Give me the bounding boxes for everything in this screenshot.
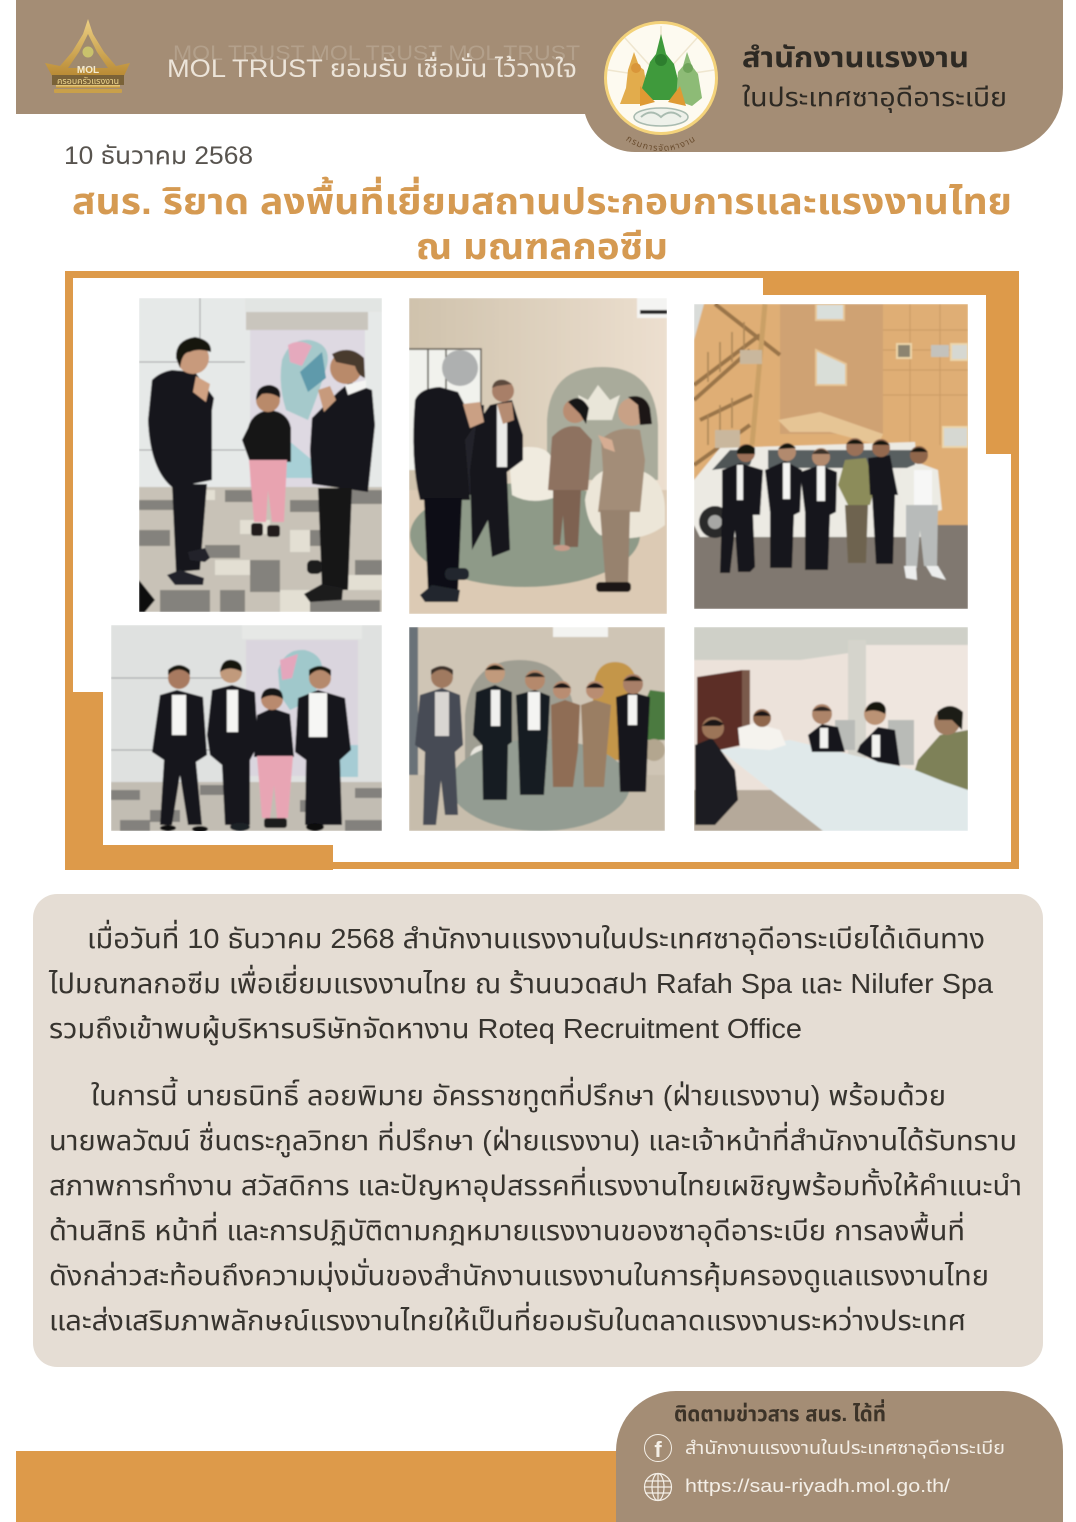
icon: MOL gold logo: ครอบครัวแรงงาน	[57, 76, 119, 86]
date: 10 ธันวาคม 2568	[64, 142, 253, 170]
icon: globe	[644, 1474, 672, 1500]
slogan: MOL TRUST ยอมรับ เชื่อมั่น ไว้วางใจ	[167, 51, 577, 83]
icon: facebook	[644, 1434, 672, 1462]
photo: greeting at door	[139, 298, 382, 612]
photo: group in spa	[409, 627, 665, 831]
office name: สำนักงานแรงงาน	[742, 42, 969, 73]
ghost slogan: MOL TRUST MOL TRUST MOL TRUST	[173, 42, 580, 65]
footer heading: ติดตามข่าวสาร สนร. ได้ที่	[674, 1399, 886, 1426]
photo: greeting at spa	[409, 298, 667, 614]
paragraph 2: นายพลวัฒน์ ชื่นตระกูลวิทยา ที่ปรึกษา (ฝ่ายแรงงาน) และเจ้าหน้าที่สำนักงานได้รับทราบ	[49, 1121, 1017, 1158]
paragraph 2: และส่งเสริมภาพลักษณ์แรงงานไทยให้เป็นที่ยอมรับในตลาดแรงงานระหว่างประเทศ	[49, 1301, 966, 1336]
icon: MOL gold logo: MOL	[77, 65, 99, 76]
paragraph 2	[49, 1076, 1022, 1336]
title: ณ มณฑลกอซีม	[416, 226, 668, 267]
panel: footer contact	[616, 1391, 1063, 1522]
panel: body text	[33, 894, 1043, 1367]
icon: facebook: f	[654, 1437, 662, 1462]
icon: ministry emblem: กรมการจัดหางาน	[626, 136, 695, 151]
paragraph 2: ดังกล่าวสะท้อนถึงความมุ่งมั่นของสำนักงานแรงงานในการคุ้มครองดูแลแรงงานไทย	[49, 1258, 989, 1293]
paragraph 2: สภาพการทำงาน สวัสดิการ และปัญหาอุปสรรคที่แรงงานไทยเผชิญพร้อมทั้งให้คำแนะนำ	[49, 1166, 1022, 1202]
header band	[16, 0, 1063, 152]
paragraph 1: รวมถึงเข้าพบผู้บริหารบริษัทจัดหางาน Roteq Recruitment Office	[49, 1013, 802, 1046]
photo: group with van	[694, 304, 968, 609]
footer orange band	[16, 1451, 626, 1522]
photo: group at door	[111, 625, 382, 832]
office name: ในประเทศซาอุดีอาระเบีย	[742, 82, 1007, 113]
office name	[742, 42, 1007, 113]
paragraph 2: ในการนี้ นายธนิทธิ์ ลอยพิมาย อัครราชทูตที่ปรึกษา (ฝ่ายแรงงาน) พร้อมด้วย	[91, 1076, 946, 1113]
website url: https://sau-riyadh.mol.go.th/	[685, 1476, 950, 1496]
paragraph 2: ด้านสิทธิ หน้าที่ และการปฏิบัติตามกฎหมายแรงงานของซาอุดีอาระเบีย การลงพื้นที่	[49, 1211, 965, 1247]
icon: MOL gold logo	[45, 19, 130, 93]
photo frame	[65, 271, 1019, 870]
photo: meeting room	[694, 627, 968, 831]
facebook label: สำนักงานแรงงานในประเทศซาอุดีอาระเบีย	[685, 1438, 1005, 1459]
paragraph 1	[48, 919, 993, 1046]
paragraph 1: เมื่อวันที่ 10 ธันวาคม 2568 สำนักงานแรงงานในประเทศซาอุดีอาระเบียได้เดินทาง	[87, 919, 985, 955]
title: สนร. ริยาด ลงพื้นที่เยี่ยมสถานประกอบการและแรงงานไทย	[72, 176, 1012, 222]
icon: ministry emblem	[604, 21, 718, 151]
paragraph 1: ไปมณฑลกอซีม เพื่อเยี่ยมแรงงานไทย ณ ร้านนวดสปา Rafah Spa และ Nilufer Spa	[48, 964, 993, 999]
title	[72, 176, 1012, 267]
